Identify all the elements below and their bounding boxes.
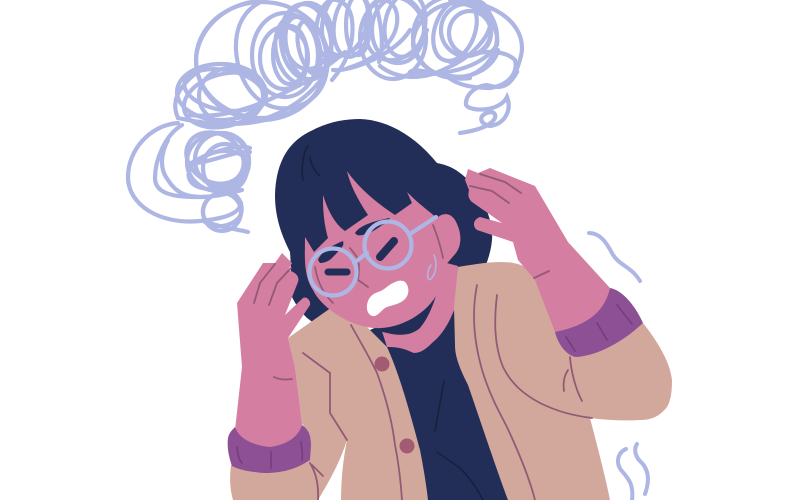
hand lines: left: [254, 264, 292, 380]
button: upper: [374, 356, 390, 372]
hand: right: [465, 168, 625, 350]
cuff: right: [555, 288, 643, 357]
jacket: right side and sleeve: [454, 262, 672, 500]
sweat drop: [428, 255, 436, 280]
hair strands: [302, 146, 320, 180]
face: [305, 171, 460, 328]
jacket creases: left: [303, 325, 402, 500]
icon: shake line right of hand: [589, 233, 640, 281]
icon: shake line left near elbow: [618, 449, 632, 500]
gap between arm and body: [318, 440, 347, 500]
face creases: [315, 225, 443, 303]
jacket: left side and sleeve: [230, 305, 428, 500]
eyebrow: right: [355, 218, 390, 235]
jacket creases: right: [474, 285, 592, 500]
mouth: [367, 281, 408, 316]
eyebrow: left: [318, 241, 343, 263]
eye: right: [380, 241, 394, 257]
neck: [380, 262, 458, 353]
eye: left: [328, 268, 347, 276]
cuff: left: [228, 425, 311, 473]
icon: tangled scribble above head: [128, 0, 522, 232]
icon: shake line right near elbow: [635, 444, 648, 494]
shirt: [370, 290, 520, 500]
neck shadow: [377, 288, 438, 335]
button: lower: [400, 438, 414, 454]
shirt creases: [435, 381, 483, 500]
glasses: [310, 217, 436, 296]
hand lines: right: [470, 174, 549, 278]
hair back: [275, 119, 492, 335]
hand: left: [235, 253, 310, 455]
